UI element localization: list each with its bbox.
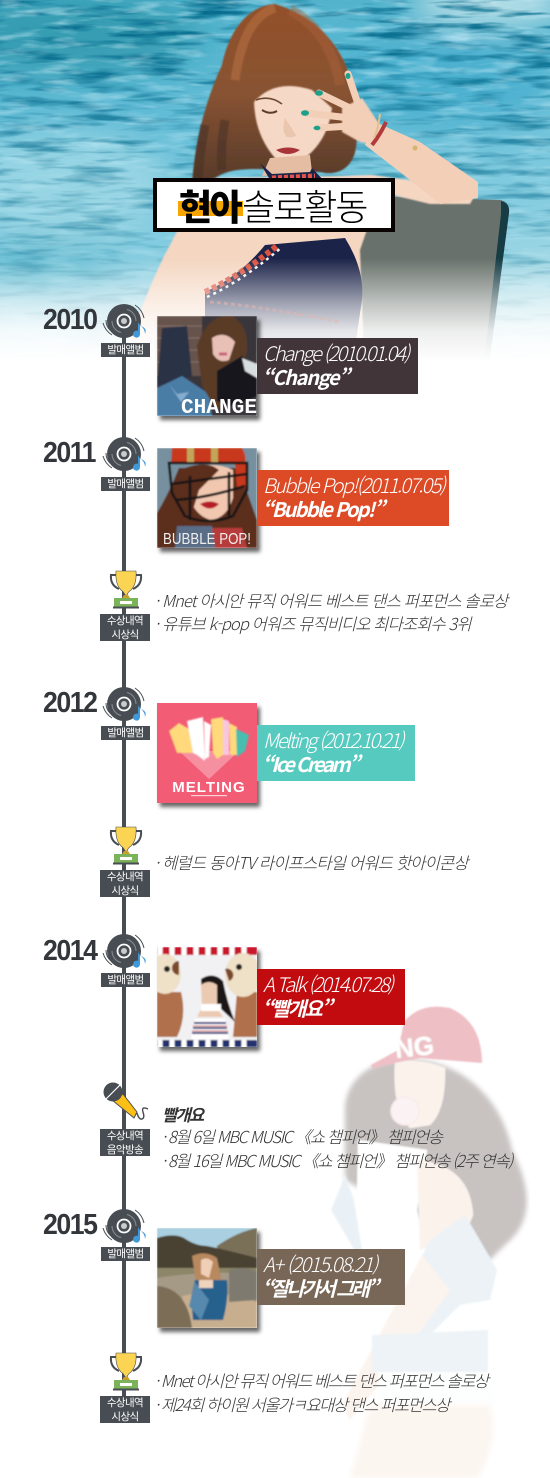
album cover: Melting — [157, 703, 257, 803]
label: album release 2010: 발매앨범 — [107, 342, 144, 357]
icon: microphone — [104, 1082, 148, 1120]
banner: Ice Cream: “Ice Cream” — [262, 749, 358, 778]
hair — [192, 4, 357, 186]
label: album release 2015: 발매앨범 — [107, 1246, 144, 1261]
label: album release 2011: 발매앨범 — [107, 476, 144, 491]
year: 2012: 2012 — [43, 687, 96, 719]
body — [115, 175, 478, 380]
award list music show: · 8월 6일 MBC MUSIC 《쇼 챔피언》 챔피언송 — [162, 1124, 442, 1148]
banner: 잘나가서 그래: “잘나가서 그래” — [262, 1273, 376, 1302]
label: award music show: 음악방송 — [107, 1142, 143, 1156]
label: album release 2014: 발매앨범 — [107, 972, 144, 987]
label: award 2015: 시상식 — [111, 1408, 139, 1424]
banner: Bubble Pop: “Bubble Pop!” — [262, 494, 383, 523]
banner: 빨개요: “빨개요” — [262, 993, 330, 1022]
neck and top strap — [260, 155, 325, 183]
banner: 빨개요: A Talk (2014.07.28) — [263, 969, 392, 998]
timeline line — [122, 330, 126, 1420]
title box — [153, 178, 395, 232]
award list 2012: · 헤럴드 동아TV 라이프스타일 어워드 핫아이콘상 — [155, 850, 468, 874]
chair — [330, 197, 509, 380]
banner: Bubble Pop: Bubble Pop!(2011.07.05) — [263, 470, 444, 499]
year: 2011: 2011 — [43, 437, 95, 469]
icon: disc 2011 — [102, 437, 146, 471]
ghost portrait — [331, 1007, 527, 1478]
label: award music show: 수상내역 — [107, 1128, 143, 1143]
label: award music show — [100, 1129, 150, 1156]
icon: disc 2014 — [102, 934, 146, 968]
award list 2015: · Mnet 아시안 뮤직 어워드 베스트 댄스 퍼포먼스 솔로상 — [155, 1368, 487, 1392]
award list 2015 — [155, 1368, 491, 1416]
year: 2010: 2010 — [43, 304, 96, 336]
banner: 잘나가서 그래 — [257, 1249, 405, 1305]
label: award 2015: 수상내역 — [107, 1395, 143, 1410]
award list music show — [162, 1102, 514, 1172]
banner: Ice Cream: Melting (2012.10.21) — [263, 725, 403, 754]
ghost portrait: NG — [393, 1030, 435, 1064]
banner: Ice Cream — [257, 725, 415, 781]
banner: 잘나가서 그래: A+ (2015.08.21) — [263, 1249, 377, 1278]
label: award 2012: 시상식 — [111, 882, 139, 898]
title highlight — [178, 201, 243, 216]
banner: Change: “Change” — [262, 362, 348, 391]
album cover: A+ — [157, 1228, 257, 1328]
award list 2011 — [155, 588, 510, 635]
icon: disc 2015 — [102, 1209, 146, 1243]
award list 2011: · Mnet 아시안 뮤직 어워드 베스트 댄스 퍼포먼스 솔로상 — [155, 588, 507, 612]
album cover: A Talk — [157, 947, 257, 1047]
award list music show: 빨개요 — [162, 1102, 203, 1126]
banner: Change: Change (2010.01.04) — [263, 338, 408, 367]
label: album release 2012: 발매앨범 — [107, 725, 144, 740]
label: award 2012: 수상내역 — [107, 869, 143, 884]
title text: 현아솔로활동 — [179, 179, 367, 231]
banner: 빨개요 — [257, 969, 405, 1025]
icon: trophy 2015 — [110, 1352, 142, 1390]
year: 2014: 2014 — [43, 935, 96, 967]
water ripples — [0, 0, 550, 323]
water tones — [0, 0, 550, 287]
award list 2011: · 유튜브 k-pop 어워즈 뮤직비디오 최다조회수 3위 — [155, 611, 471, 635]
icon: disc 2010 — [102, 304, 146, 338]
banner: Bubble Pop — [257, 470, 449, 526]
icon: disc 2012 — [102, 687, 146, 721]
label: award 2015 — [100, 1396, 150, 1423]
award list music show: · 8월 16일 MBC MUSIC 《쇼 챔피언》 챔피언송 (2주 연속) — [162, 1148, 512, 1172]
icon: trophy 2011 — [110, 570, 142, 608]
album cover: Melting: MELTING — [172, 779, 246, 796]
fade to white — [0, 258, 550, 362]
face — [254, 86, 332, 163]
award list 2015: · 제24회 하이원 서울가ㅋ요대상 댄스 퍼포먼스상 — [155, 1392, 449, 1416]
hand and arm — [301, 73, 478, 204]
label: award 2011: 수상내역 — [107, 613, 143, 628]
label: award 2012 — [100, 870, 150, 897]
album cover: Change — [157, 316, 257, 416]
label: award 2011 — [100, 614, 150, 641]
icon: trophy 2012 — [110, 826, 142, 864]
label: award 2011: 시상식 — [111, 626, 139, 642]
year: 2015: 2015 — [43, 1209, 96, 1241]
album cover: Bubble Pop — [157, 448, 257, 548]
banner: Change — [257, 338, 418, 394]
